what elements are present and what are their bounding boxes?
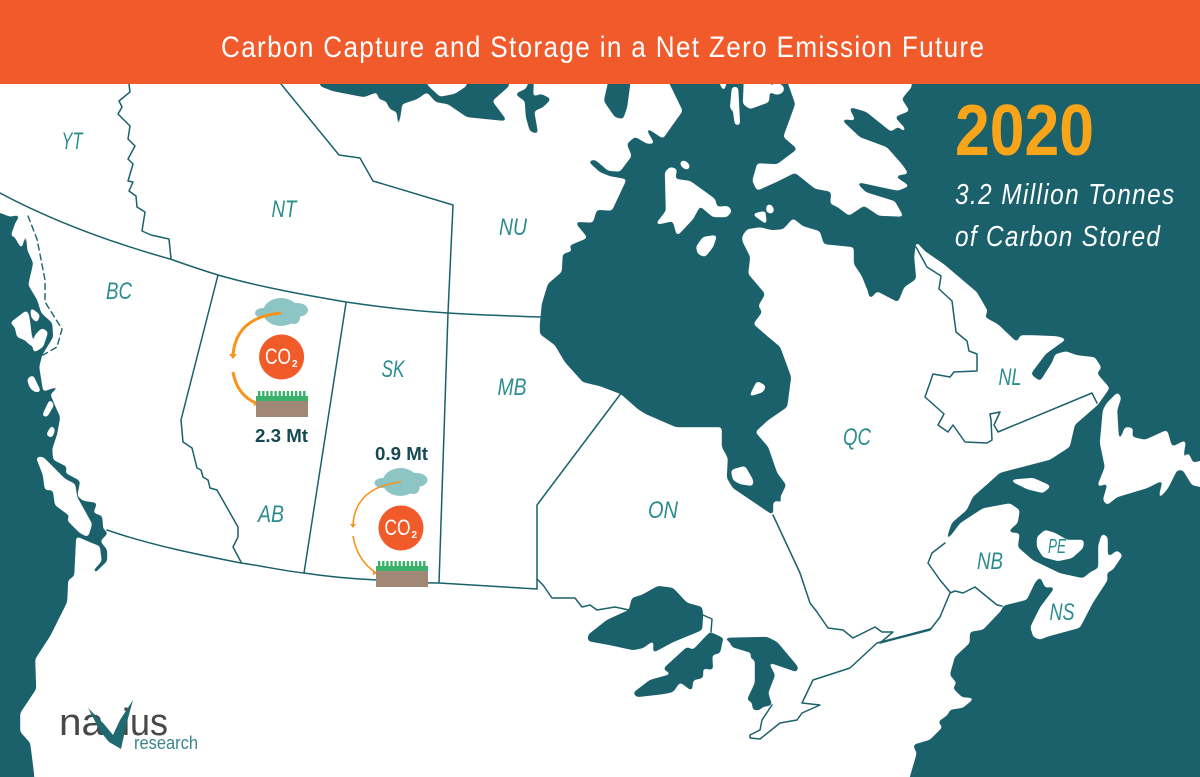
Labrador border: [916, 247, 1097, 443]
MB / ON border: [537, 392, 622, 589]
Hudson Bay, Arctic and Atlantic water: [540, 70, 1200, 777]
Prince Edward Island: [1037, 530, 1084, 561]
top island d: [770, 84, 784, 94]
cloud: [374, 468, 428, 496]
logo research: research: [134, 733, 198, 753]
Alberta CCS icon: [229, 298, 308, 446]
NS: NS: [1050, 599, 1074, 626]
60th parallel border: [0, 193, 541, 317]
YT / NT border: [118, 84, 171, 259]
title banner: [0, 0, 1200, 84]
CO2 badge: CO: [265, 344, 291, 369]
Vancouver Island: [36, 457, 92, 537]
QC: QC: [843, 424, 872, 451]
Haida Gwaii south: [33, 328, 48, 353]
ON / US border: [537, 579, 629, 610]
CO2 badge: CO: [384, 515, 410, 540]
year heading: 2020: [955, 91, 1094, 171]
Sault connector: [703, 615, 712, 632]
logo word ius: ius: [122, 702, 168, 744]
Haida Gwaii small: [30, 307, 40, 323]
PE: PE: [1048, 536, 1066, 558]
top island c: [743, 80, 770, 109]
Lake Michigan: [633, 632, 723, 697]
CO2 badge: 2: [412, 530, 418, 541]
US border west: [107, 530, 537, 589]
CO2 badge: 2: [292, 359, 298, 370]
AB: AB: [256, 501, 284, 528]
stored carbon text: [955, 178, 1174, 252]
Pacific Ocean: [0, 213, 108, 777]
top island b: [730, 87, 740, 125]
small island: [679, 159, 691, 171]
Mansel Island: [752, 211, 767, 225]
cloud: [255, 298, 308, 326]
Arctic inlet east: [515, 70, 551, 134]
Haida Gwaii north: [10, 310, 33, 348]
map: provincial borders: [0, 84, 1097, 739]
NT: NT: [272, 196, 298, 223]
map: islands: [10, 80, 1200, 561]
SK: SK: [382, 356, 405, 383]
top island a: [718, 80, 727, 92]
Lake Superior: [588, 586, 703, 653]
orange cycle arrows: [229, 313, 281, 406]
southern Ontario: [750, 629, 930, 739]
logo word na: na: [59, 702, 105, 744]
Newfoundland: [1097, 392, 1200, 505]
BC: BC: [106, 278, 133, 305]
YT: YT: [62, 128, 84, 155]
CO2 badge: [378, 506, 424, 550]
Arctic blob: [604, 70, 632, 119]
Alaska dashed border: [28, 216, 62, 355]
province labels: [62, 128, 1074, 626]
Arctic inlet west: [320, 70, 509, 134]
AB / SK border: [304, 303, 346, 573]
soil and grass: [376, 564, 428, 587]
CO2 badge: [259, 334, 304, 380]
coastal island a: [27, 375, 41, 392]
Baffin area islands: [655, 167, 732, 236]
line two: of Carbon Stored: [955, 220, 1161, 252]
coastal island b: [42, 399, 54, 417]
NB: NB: [977, 548, 1003, 575]
logo: Navius Research: [59, 700, 198, 753]
small island e: [765, 203, 775, 215]
AB / BC border: [181, 275, 241, 562]
ON: ON: [648, 497, 679, 524]
MB: MB: [498, 374, 526, 401]
Anticosti Island: [1009, 478, 1051, 493]
Belcher Islands: [746, 381, 766, 403]
NL: NL: [998, 364, 1022, 391]
NT / NU border: [281, 84, 453, 583]
logo check mark: [88, 700, 133, 749]
amount: Alberta: 2.3 Mt: [255, 426, 308, 446]
Southampton Island: [696, 235, 717, 257]
line one: 3.2 Million Tonnes: [955, 178, 1174, 210]
NU: NU: [499, 214, 528, 241]
Lake Huron: [723, 637, 798, 710]
James Bay island: [731, 466, 753, 486]
coastal island c: [46, 425, 55, 438]
ON / QC border: [773, 515, 1002, 643]
title: Carbon Capture and Storage in a Net Zero Emission Future: [221, 30, 984, 63]
soil and grass: [256, 394, 308, 417]
Saskatchewan CCS icon: [350, 444, 428, 587]
orange cycle arrows: [350, 482, 401, 575]
amount: Saskatchewan: 0.9 Mt: [375, 444, 428, 464]
NB west border: [928, 543, 950, 592]
